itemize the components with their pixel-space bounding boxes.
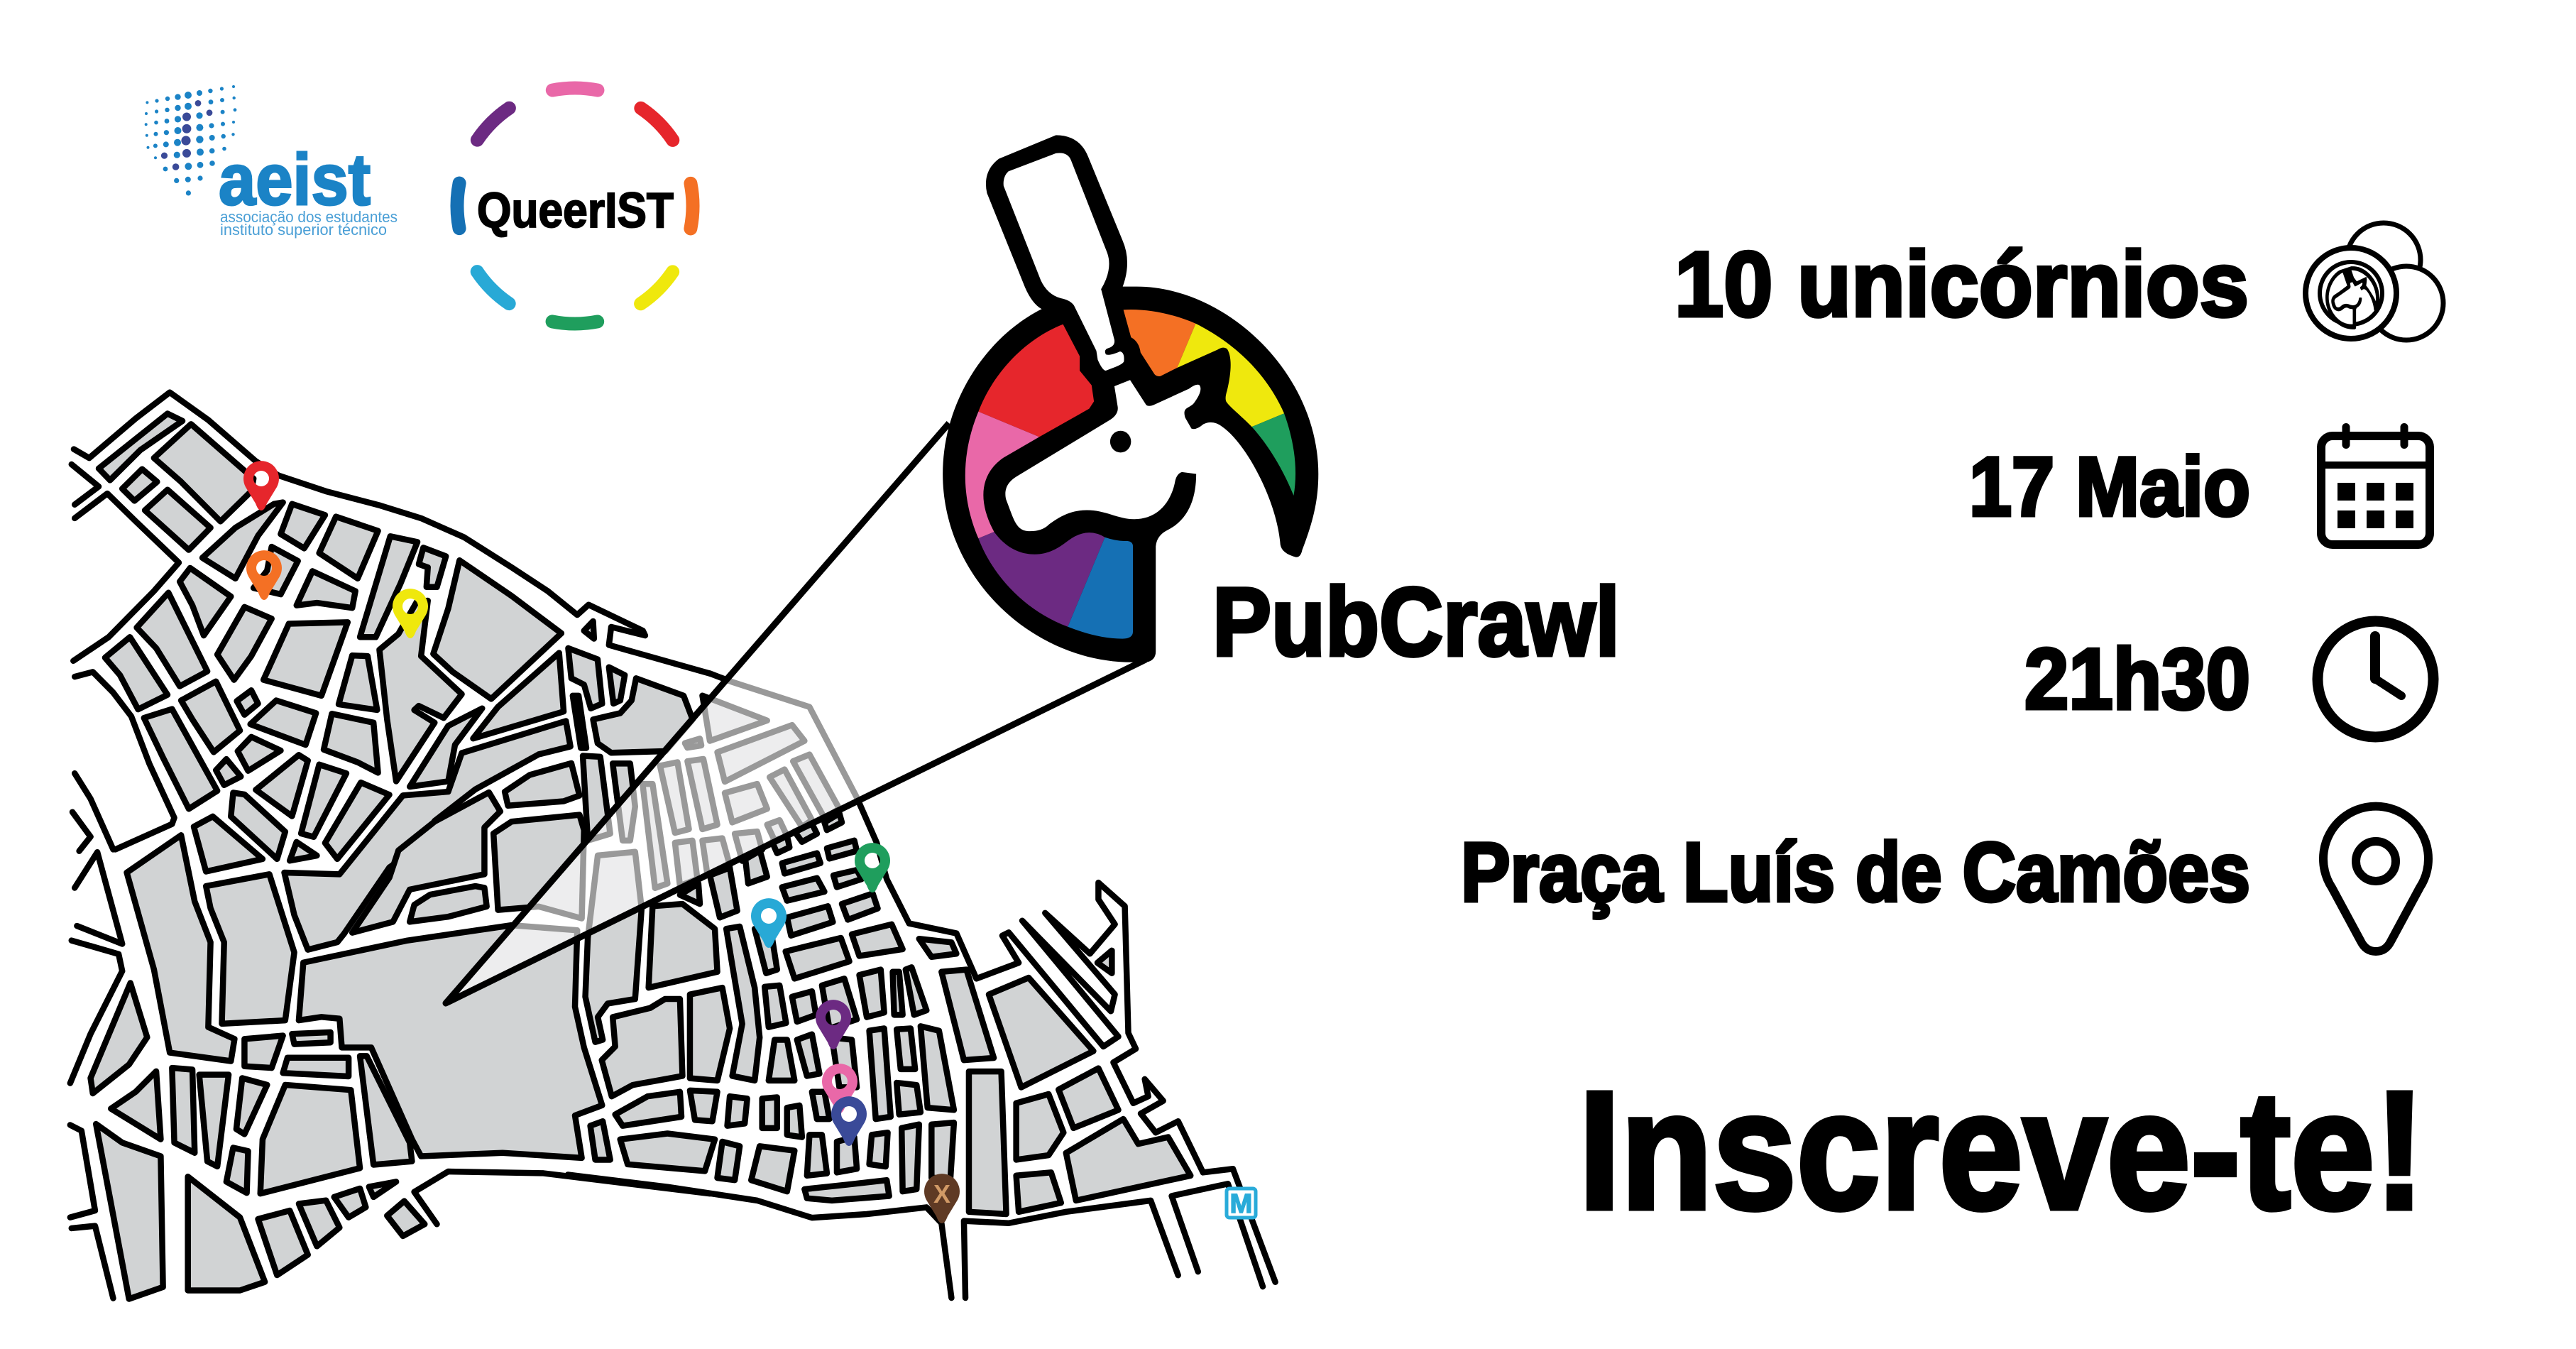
AEIST logo bbox=[145, 85, 398, 239]
map pin: purple bbox=[816, 1000, 851, 1049]
map pin: red bbox=[243, 461, 279, 510]
bottle interior bbox=[1004, 153, 1124, 371]
map pin: brown with X: X bbox=[933, 1179, 950, 1208]
event info: time: 21h30 bbox=[2024, 630, 2250, 727]
rainbow ring segments bbox=[412, 43, 738, 369]
map pin: navy bbox=[831, 1096, 867, 1146]
PubCrawl title: PubCrawl bbox=[1212, 568, 1620, 677]
AEIST dark dots bbox=[161, 100, 212, 170]
black head and ring silhouette bbox=[943, 287, 1318, 662]
AEIST subtitle line 1: associação dos estudantes bbox=[220, 208, 398, 226]
AEIST halftone dots bbox=[145, 85, 236, 196]
AEIST wordmark: aeist bbox=[219, 139, 371, 220]
call to action: Inscreve-te! bbox=[1579, 1056, 2425, 1245]
QueerIST wordmark: QueerIST bbox=[477, 182, 674, 238]
metro station icon: M bbox=[1230, 1189, 1252, 1219]
icon: unicorn coins bbox=[2306, 223, 2443, 340]
QueerIST logo bbox=[412, 43, 738, 369]
rainbow sector: blue bbox=[1068, 537, 1133, 639]
rainbow sector: yellow bbox=[1177, 324, 1284, 427]
map pin: yellow bbox=[393, 589, 428, 638]
rainbow sector: orange bbox=[1124, 310, 1195, 376]
zoom cone from map to logo bbox=[446, 423, 1146, 1003]
icon: calendar bbox=[2321, 423, 2430, 545]
unicorn eye bbox=[1110, 431, 1131, 452]
street map of Lisbon bbox=[70, 393, 1276, 1299]
map pin: pink bbox=[822, 1064, 857, 1113]
bottle outline bbox=[986, 135, 1141, 381]
rainbow sector: green bbox=[1252, 413, 1295, 496]
rainbow sector: red bbox=[978, 324, 1094, 437]
AEIST subtitle line 2: instituto superior técnico bbox=[220, 221, 387, 239]
icon: location pin bbox=[2323, 807, 2428, 951]
map pin: light blue bbox=[751, 898, 786, 948]
event info: participants: 10 unicórnios bbox=[1675, 232, 2249, 336]
rainbow sector: purple bbox=[978, 532, 1105, 627]
map pin: green bbox=[855, 843, 890, 892]
PubCrawl unicorn logo bbox=[943, 135, 1318, 662]
map pin: orange bbox=[246, 550, 282, 600]
map pin: brown with X bbox=[924, 1174, 960, 1223]
icon: clock bbox=[2318, 621, 2433, 737]
rainbow sector: pink bbox=[965, 412, 1039, 538]
event info: date: 17 Maio bbox=[1969, 440, 2250, 534]
event info: place: Praça Luís de Camões bbox=[1461, 826, 2250, 919]
